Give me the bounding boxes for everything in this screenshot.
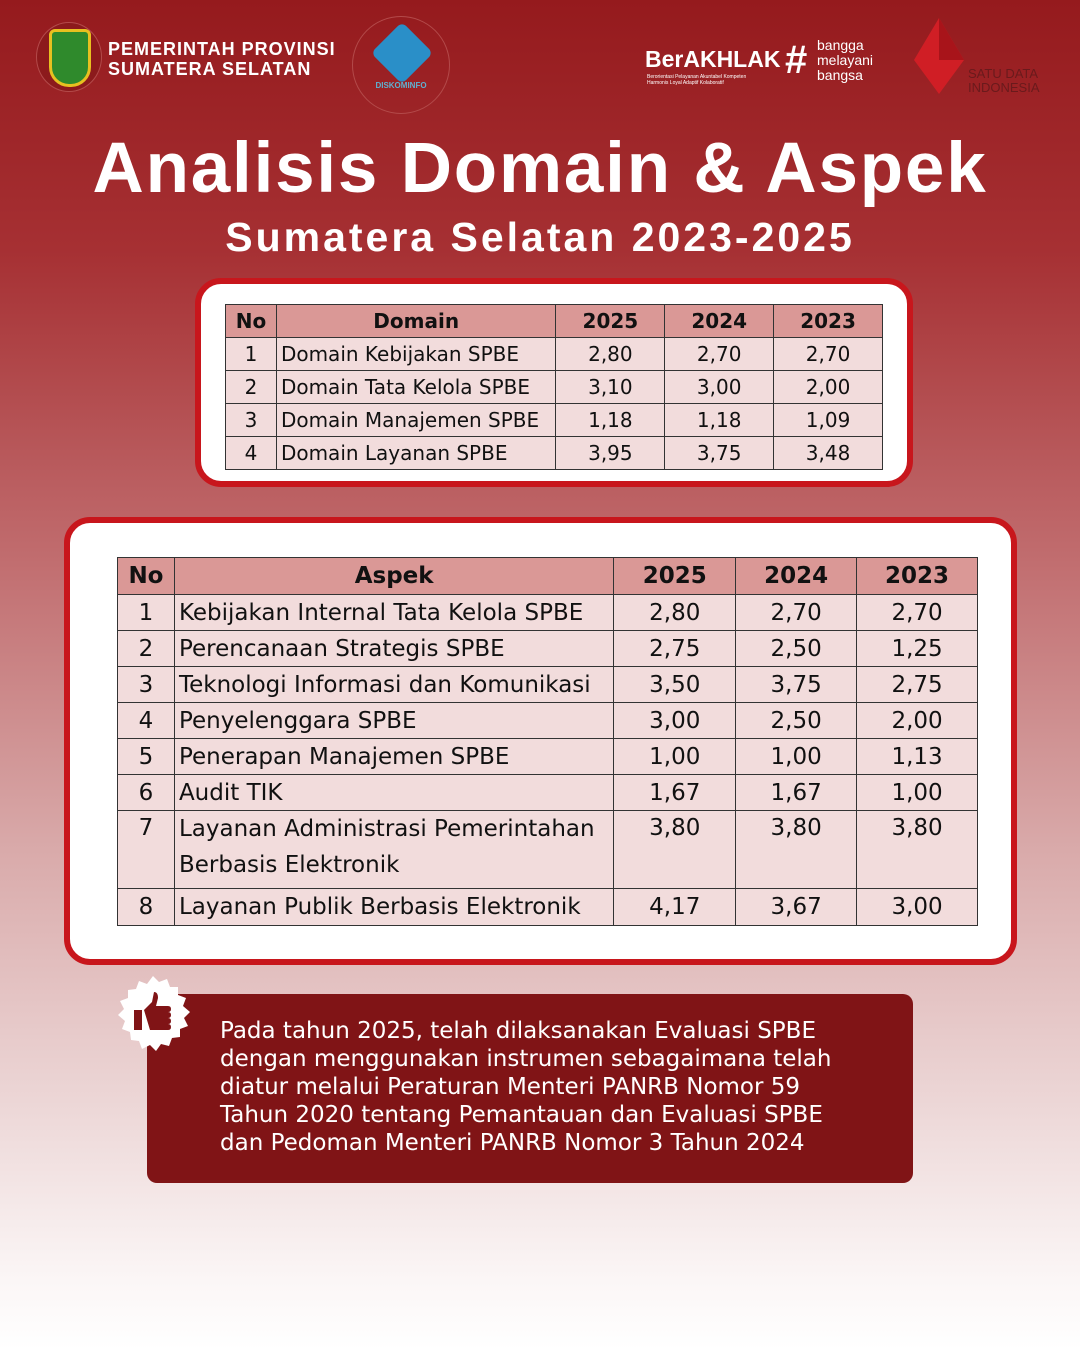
panel: domain table: 3,10 (588, 375, 633, 399)
panel: aspek table: 2,70 (891, 600, 943, 626)
panel: aspek table: Aspek (355, 563, 434, 589)
panel: aspek table: 3,00 (649, 708, 700, 734)
panel: aspek table: 2,50 (771, 636, 822, 662)
callout text: diatur melalui Peraturan Menteri PANRB Nomor 59 (220, 1074, 800, 1100)
header text: provinsi (108, 39, 336, 79)
panel: aspek table: 1,13 (891, 744, 943, 770)
panel: aspek table: 3 (139, 672, 153, 698)
panel: domain table: Domain Kebijakan SPBE (281, 342, 519, 366)
logo: satu data indonesia (914, 18, 1040, 95)
panel: aspek table: 3,75 (771, 672, 822, 698)
panel: aspek table: 2,00 (891, 708, 943, 734)
panel: aspek table: 3,80 (771, 815, 822, 841)
panel: domain table: Domain Layanan SPBE (281, 441, 507, 465)
panel: aspek table: 1,00 (649, 744, 700, 770)
logo: berakhlak: # (785, 38, 807, 82)
logo: diskominfo: DISKOMINFO (375, 81, 427, 90)
panel: domain table: No (236, 309, 266, 333)
panel: aspek table: 2 (139, 636, 153, 662)
panel: domain table: 2023 (800, 309, 856, 333)
panel: domain table: 3 (245, 408, 257, 432)
panel: domain table: 2 (245, 375, 257, 399)
panel: aspek table: 5 (139, 744, 153, 770)
panel: aspek table: Penyelenggara SPBE (179, 708, 417, 734)
panel: domain table: 1 (245, 342, 257, 366)
panel: domain table: 2,70 (806, 342, 850, 366)
panel: aspek table: 2,75 (891, 672, 943, 698)
callout text: dengan menggunakan instrumen sebagaimana telah (220, 1046, 831, 1072)
panel: aspek table: Perencanaan Strategis SPBE (179, 636, 505, 662)
panel: aspek table: 3,00 (891, 894, 943, 920)
logo: berakhlak (645, 37, 873, 86)
callout (147, 994, 913, 1183)
panel: aspek table: Layanan Publik Berbasis Elektronik (179, 894, 581, 920)
panel: domain table: Domain (373, 309, 459, 333)
logo: berakhlak: bangga (817, 37, 864, 53)
panel: domain table: 1,18 (697, 408, 741, 432)
panel: domain table: 3,00 (697, 375, 741, 399)
panel: domain table: 2,00 (806, 375, 850, 399)
callout text: Tahun 2020 tentang Pemantauan dan Evaluasi SPBE (220, 1102, 823, 1128)
panel: aspek table (64, 517, 1017, 965)
panel: domain table: Domain Tata Kelola SPBE (281, 375, 530, 399)
panel: aspek table: Layanan Administrasi Pemerintahan Berbasis Elektronik (179, 816, 595, 878)
panel: domain table: 3,48 (806, 441, 850, 465)
logo: berakhlak: bangsa (817, 67, 863, 83)
panel: aspek table: 2,70 (771, 600, 822, 626)
panel: aspek table: Kebijakan Internal Tata Kelola SPBE (179, 600, 583, 626)
panel: aspek table: Teknologi Informasi dan Komunikasi (179, 672, 591, 698)
logo: berakhlak: BerAKHLAK (645, 46, 780, 72)
logo: satu data indonesia: SATU DATA (968, 66, 1038, 81)
logo: berakhlak: melayani (817, 52, 873, 68)
callout text: dan Pedoman Menteri PANRB Nomor 3 Tahun 2024 (220, 1130, 805, 1156)
panel: aspek table: Penerapan Manajemen SPBE (179, 744, 509, 770)
header text: provinsi: SUMATERA SELATAN (108, 59, 311, 79)
header text: provinsi: PEMERINTAH PROVINSI (108, 39, 336, 59)
panel: aspek table: 1,67 (649, 780, 700, 806)
panel: aspek table: 3,67 (771, 894, 822, 920)
panel: domain table: 1,09 (806, 408, 850, 432)
icon: thumbs up badge (118, 976, 190, 1051)
panel: aspek table: 2,80 (649, 600, 700, 626)
panel: aspek table: 8 (139, 894, 153, 920)
callout text: Pada tahun 2025, telah dilaksanakan Evaluasi SPBE (220, 1018, 816, 1044)
panel: domain table: Domain Manajemen SPBE (281, 408, 539, 432)
panel: domain table (195, 278, 913, 487)
panel: aspek table: 6 (139, 780, 153, 806)
panel: aspek table: 2024 (764, 563, 828, 589)
panel: aspek table: 2025 (643, 563, 707, 589)
logo: diskominfo (352, 16, 450, 114)
panel: domain table: 3,95 (588, 441, 633, 465)
panel: aspek table: 2,75 (649, 636, 700, 662)
panel: aspek table: No (128, 563, 164, 589)
panel: domain table: 2024 (691, 309, 747, 333)
callout text (220, 1018, 831, 1156)
logo: satu data indonesia: INDONESIA (968, 80, 1040, 95)
panel: aspek table: 4 (139, 708, 153, 734)
logo: provinsi emblem (36, 22, 102, 92)
title: Analisis Domain & Aspek (93, 129, 987, 208)
panel: aspek table: 3,50 (649, 672, 700, 698)
panel: aspek table: 7 (139, 815, 153, 841)
subtitle: Sumatera Selatan 2023-2025 (225, 214, 855, 260)
logo: berakhlak: Berorientasi Pelayanan Akuntabel Kompeten (647, 74, 746, 80)
panel: aspek table: 1,00 (891, 780, 943, 806)
panel: aspek table: 4,17 (649, 894, 700, 920)
panel: aspek table: 2,50 (771, 708, 822, 734)
panel: aspek table: 1,25 (891, 636, 943, 662)
panel: aspek table: 2023 (885, 563, 949, 589)
panel: aspek table: 1,67 (771, 780, 822, 806)
panel: aspek table: 1,00 (771, 744, 822, 770)
logo: berakhlak: Harmonis Loyal Adaptif Kolaboratif (647, 80, 724, 86)
panel: domain table: 2025 (583, 309, 638, 333)
panel: domain table: 2,80 (588, 342, 633, 366)
panel: domain table: 1,18 (588, 408, 633, 432)
panel: aspek table: 3,80 (891, 815, 943, 841)
panel: aspek table: 1 (139, 600, 153, 626)
panel: aspek table: 3,80 (649, 815, 700, 841)
panel: aspek table: Audit TIK (179, 780, 282, 806)
panel: domain table: 2,70 (697, 342, 741, 366)
panel: domain table: 3,75 (697, 441, 741, 465)
panel: domain table: 4 (245, 441, 257, 465)
